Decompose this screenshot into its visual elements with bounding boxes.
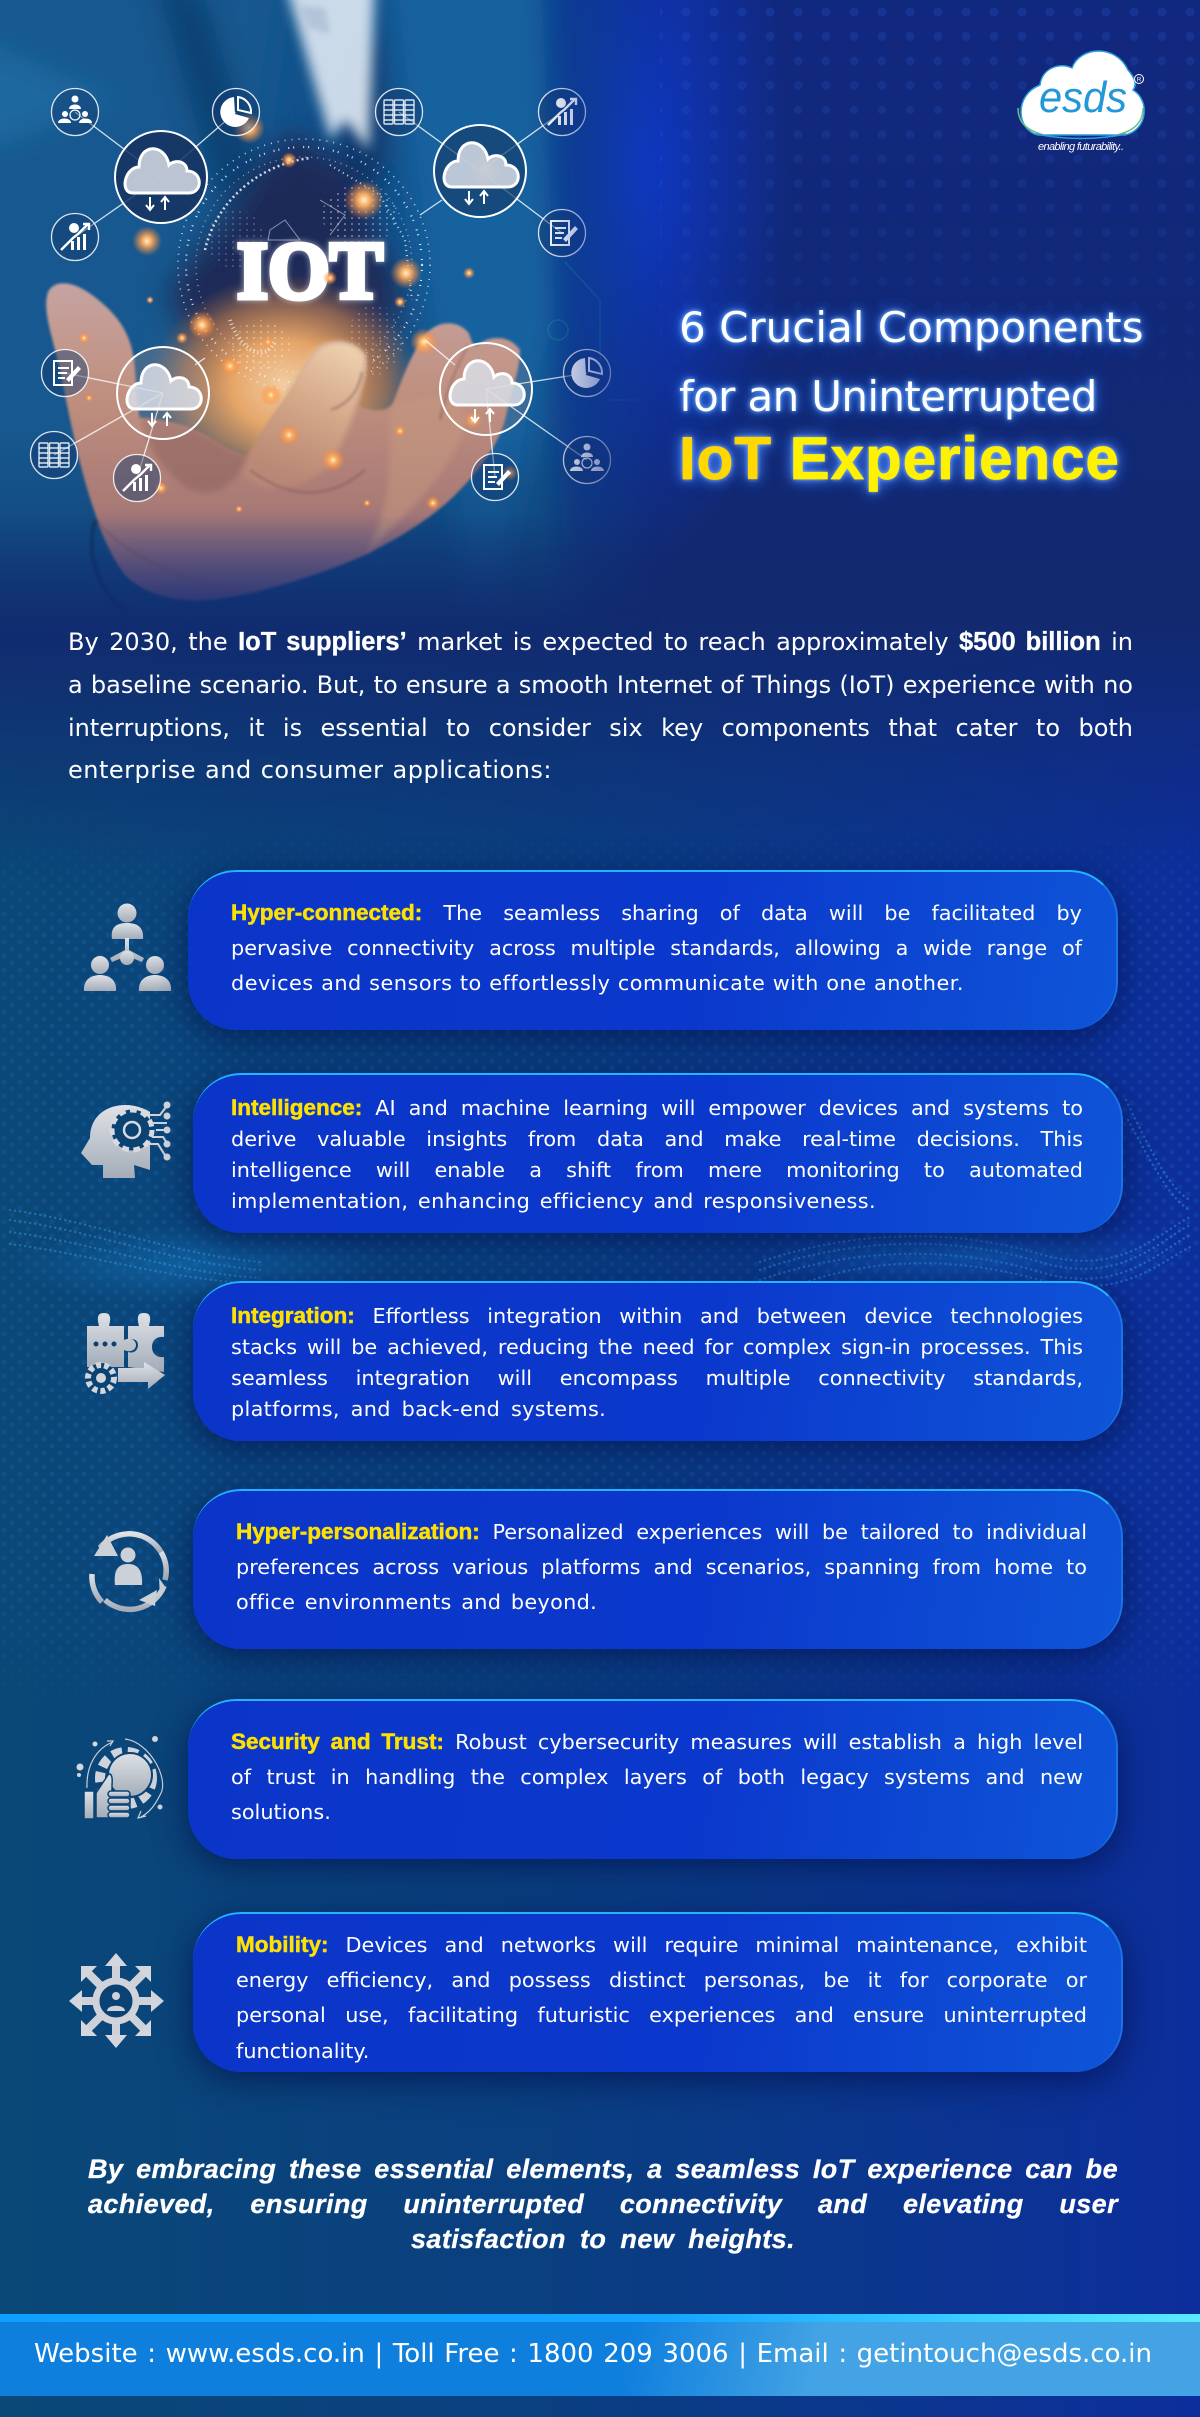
intro paragraph: enterprise and consumer applications: <box>68 756 552 784</box>
panel: intelligence: derive valuable insights from data and make real-time decisions. This <box>231 1127 1083 1151</box>
panel: hyper-personalization <box>193 1489 1123 1649</box>
title: 6 Crucial Components <box>679 303 1144 352</box>
hero: bottom-right cloud node <box>440 343 532 435</box>
logo: esds cloud: esds <box>1039 73 1127 122</box>
panel: integration <box>193 1281 1123 1441</box>
panel: security and trust <box>188 1699 1118 1859</box>
intro paragraph: interruptions, it is essential to consider six key components that cater to both <box>68 714 1133 742</box>
title: IoT Experience <box>679 425 1120 492</box>
background: halftone dots and waves <box>2 8 1198 1635</box>
panel: security and trust: solutions. <box>231 1800 331 1824</box>
hero: IOT text: IOT <box>237 225 383 316</box>
panel: hyper-connected <box>188 870 1118 1030</box>
hero illustration: hand holding IoT globe <box>0 0 643 604</box>
closing statement: satisfaction to new heights. <box>411 2224 795 2254</box>
panel: hyper-personalization: Hyper-personalization: Personalized experiences will be tailored to individual <box>236 1519 1087 1544</box>
panel: mobility: personal use, facilitating futuristic experiences and ensure uninterrupted <box>236 2003 1087 2027</box>
panel: mobility: functionality. <box>236 2039 369 2063</box>
closing statement: By embracing these essential elements, a seamless IoT experience can be <box>88 2154 1118 2184</box>
footer contact bar: Website : www.esds.co.in | Toll Free : 1800 209 3006 | Email : getintouch@esds.co.in <box>34 2339 1152 2369</box>
intro paragraph: By 2030, the IoT suppliers’ market is expected to reach approximately $500 billion in <box>68 628 1133 656</box>
panel: intelligence: Intelligence: AI and machine learning will empower devices and systems to <box>231 1095 1083 1120</box>
hero: globe of dots <box>178 139 430 391</box>
panel: integration: stacks will be achieved, reducing the need for complex sign-in processes. This <box>231 1335 1083 1359</box>
panel: integration: platforms, and back-end systems. <box>231 1397 606 1421</box>
panel: hyper-personalization: office environments and beyond. <box>236 1590 597 1614</box>
hero: suit background <box>0 0 643 604</box>
background: dark navy top overlay <box>0 0 1200 880</box>
panel: integration: Integration: Effortless integration within and between device technologies <box>231 1303 1083 1328</box>
icon: integration puzzle, gear and arrow <box>85 1313 165 1394</box>
icon: security thumbs-up with gear <box>76 1736 164 1819</box>
panel: hyper-connected: Hyper-connected: The seamless sharing of data will be facilitated by <box>231 900 1082 925</box>
title: for an Uninterrupted <box>679 372 1097 421</box>
panel: hyper-connected: devices and sensors to effortlessly communicate with one another. <box>231 971 964 995</box>
icon: hyper-personalization person in cycle <box>89 1531 169 1612</box>
panel: intelligence <box>193 1073 1123 1233</box>
hero: top-left cloud node <box>115 131 207 223</box>
hero: connector lines <box>54 112 587 478</box>
panel: intelligence: implementation, enhancing efficiency and responsiveness. <box>231 1189 876 1213</box>
panel: integration: seamless integration will encompass multiple connectivity standards, <box>231 1366 1083 1390</box>
logo: esds cloud: R <box>1137 78 1142 84</box>
hero: IOT text: IOT <box>237 225 383 316</box>
hero: circuit lines <box>548 262 640 400</box>
logo: esds cloud: enabling futurability.. <box>1038 141 1124 153</box>
hero: orange sparks <box>78 112 518 513</box>
panel: mobility: Mobility: Devices and networks will require minimal maintenance, exhibit <box>236 1932 1087 1957</box>
icon: intelligence head with gear <box>81 1102 170 1178</box>
hero: top-right cloud node <box>434 125 526 217</box>
title <box>670 302 1150 501</box>
footer contact bar <box>0 2314 1200 2396</box>
panel: mobility: energy efficiency, and possess distinct personas, be it for corporate or <box>236 1968 1087 1992</box>
panel: mobility <box>193 1912 1123 2072</box>
closing statement <box>88 2154 1119 2254</box>
hero: bottom-left cloud node <box>117 347 209 439</box>
panel: security and trust: Security and Trust: Robust cybersecurity measures will establish a high level <box>231 1729 1083 1754</box>
panel: hyper-connected: pervasive connectivity across multiple standards, allowing a wide range of <box>231 936 1082 960</box>
hero: orange glow <box>158 278 411 457</box>
logo: esds cloud <box>1017 50 1145 153</box>
hero: hand <box>46 283 520 610</box>
panel: security and trust: of trust in handling the complex layers of both legacy systems and new <box>231 1765 1083 1789</box>
closing statement: achieved, ensuring uninterrupted connectivity and elevating user <box>88 2189 1118 2219</box>
intro paragraph <box>68 628 1133 784</box>
hero: small icon nodes <box>30 88 610 502</box>
panel: hyper-personalization: preferences across various platforms and scenarios, spanning from home to <box>236 1555 1087 1579</box>
intro paragraph: a baseline scenario. But, to ensure a smooth Internet of Things (IoT) experience with no <box>68 670 1133 698</box>
panel: intelligence: intelligence will enable a shift from mere monitoring to automated <box>231 1158 1083 1182</box>
